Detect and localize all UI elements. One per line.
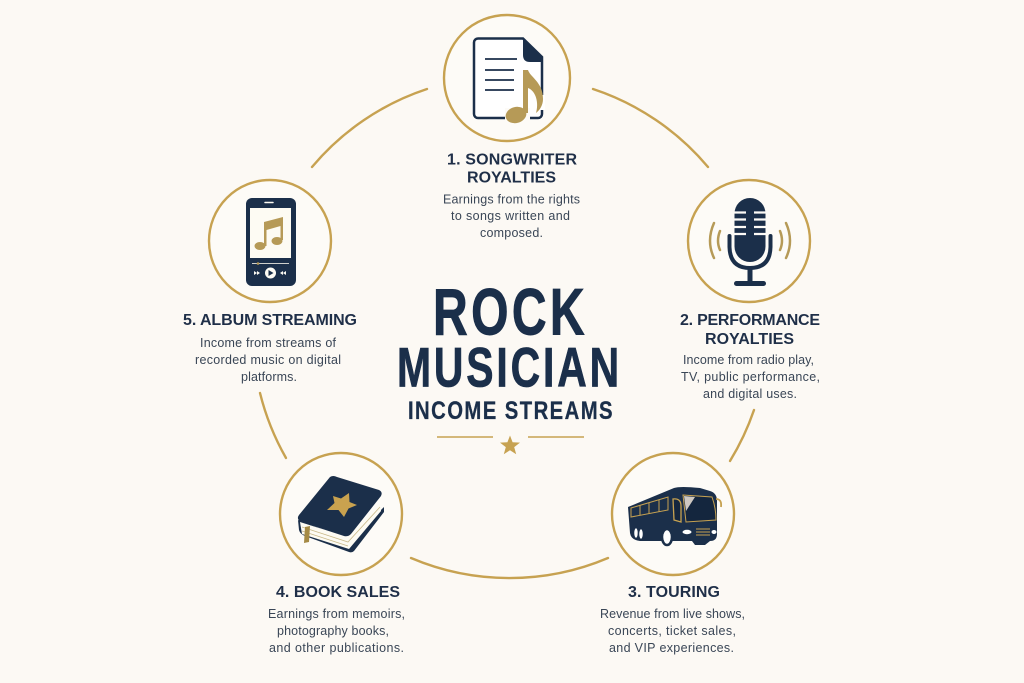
description xyxy=(681,353,820,401)
description: and VIP experiences. xyxy=(609,641,734,655)
icon: book with star xyxy=(280,453,402,575)
description: recorded music on digital xyxy=(195,353,341,367)
description: composed. xyxy=(480,226,543,240)
title: INCOME STREAMS xyxy=(408,397,614,425)
panel: album streaming xyxy=(183,180,357,384)
description: Income from radio play, xyxy=(683,353,814,367)
description: Revenue from live shows, xyxy=(600,607,745,621)
title ornament: lines and star xyxy=(437,436,584,454)
heading xyxy=(447,152,577,186)
panel: performance royalties xyxy=(680,180,820,401)
icon: tour bus xyxy=(612,453,734,575)
description: and digital uses. xyxy=(703,387,797,401)
description xyxy=(268,607,405,655)
heading: 4. BOOK SALES xyxy=(276,584,400,601)
panel: songwriter royalties xyxy=(443,15,580,240)
icon: microphone xyxy=(688,180,810,302)
heading: 2. PERFORMANCE xyxy=(680,312,820,329)
description: photography books, xyxy=(277,624,389,638)
panel: book sales xyxy=(268,453,405,655)
description: TV, public performance, xyxy=(681,370,820,384)
description: Earnings from memoirs, xyxy=(268,607,405,621)
description xyxy=(195,336,341,384)
heading xyxy=(680,312,820,348)
description: Earnings from the rights xyxy=(443,192,580,206)
connecting ring arcs xyxy=(260,89,754,578)
description xyxy=(443,192,580,240)
title: MUSICIAN xyxy=(397,336,622,398)
description xyxy=(600,607,745,655)
icon: document with music note xyxy=(444,15,570,141)
panel: touring xyxy=(600,453,745,655)
icon: phone with music xyxy=(209,180,331,302)
title: ROCK xyxy=(433,274,588,348)
description: and other publications. xyxy=(269,641,404,655)
description: concerts, ticket sales, xyxy=(608,624,736,638)
title xyxy=(397,274,622,425)
description: platforms. xyxy=(241,370,297,384)
heading: ROYALTIES xyxy=(705,331,794,348)
heading: 3. TOURING xyxy=(628,584,720,601)
heading: 1. SONGWRITER xyxy=(447,152,577,168)
heading: ROYALTIES xyxy=(467,170,556,186)
description: to songs written and xyxy=(451,209,570,223)
heading: 5. ALBUM STREAMING xyxy=(183,312,357,329)
description: Income from streams of xyxy=(200,336,337,350)
